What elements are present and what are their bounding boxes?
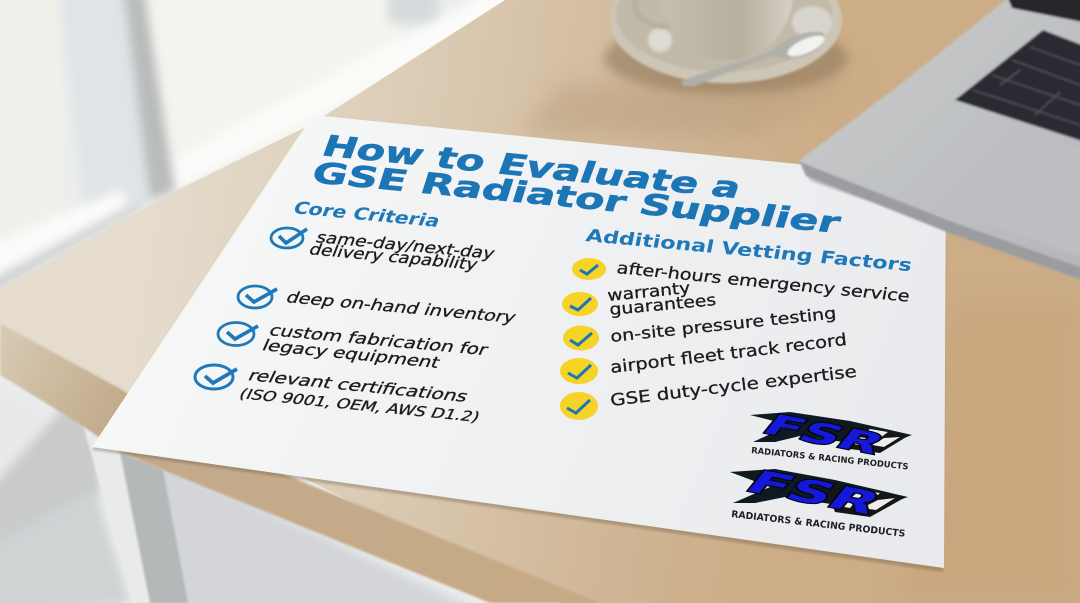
- item: on-site pressure testing: [563, 303, 837, 350]
- spoon: [681, 32, 824, 86]
- item: GSE duty-cycle expertise: [560, 362, 858, 420]
- item: deep inventory: deep on-hand inventory: [283, 288, 519, 327]
- item: custom fabrication: legacy equipment: [259, 336, 443, 372]
- item: airport fleet track record: airport fleet track record: [609, 330, 848, 377]
- item: after-hours emergency service: after-hours emergency service: [615, 258, 911, 306]
- laptop: [800, 0, 1080, 280]
- coffee saucer: [604, 0, 848, 94]
- item: GSE duty-cycle expertise: GSE duty-cycle expertise: [609, 362, 858, 410]
- logo: FSR top: FSR: [755, 409, 893, 461]
- logo: FSR bottom: RADIATORS & RACING PRODUCTS: [731, 509, 906, 540]
- logo: FSR bottom: FSR: [737, 464, 889, 522]
- heading: core criteria: Core Criteria: [290, 199, 443, 232]
- logo: FSR top: RADIATORS & RACING PRODUCTS: [751, 446, 909, 472]
- floor: [0, 375, 90, 603]
- item: deep inventory: [238, 286, 519, 327]
- item: same-day delivery: same-day/next-day: [314, 228, 498, 263]
- item: same-day delivery: delivery capability: [307, 240, 481, 274]
- item: same-day delivery: [271, 228, 498, 274]
- heading: additional vetting factors: Additional Vetting Factors: [584, 226, 914, 276]
- trackpad: [970, 140, 1080, 257]
- logo: FSR top: [750, 409, 912, 472]
- item: on-site pressure testing: on-site pressure testing: [609, 303, 837, 346]
- item: certifications: relevant certifications: [245, 366, 472, 405]
- coffee cup: [660, 0, 793, 60]
- item: after-hours emergency service: [572, 258, 911, 306]
- item: certifications: [195, 365, 482, 426]
- panel: core criteria: [195, 199, 519, 426]
- panel: additional vetting factors: [560, 226, 914, 420]
- title: GSE Radiator Supplier: [308, 156, 846, 240]
- table leg: [83, 425, 188, 603]
- wood tone shading: [520, 75, 1080, 603]
- title: [308, 129, 846, 240]
- item: custom fabrication: [218, 321, 492, 372]
- item: custom fabrication: custom fabrication for: [266, 321, 492, 359]
- logo: FSR bottom: [730, 464, 908, 540]
- paper sheet: [92, 115, 946, 568]
- item: warranty guarantees: guarantees: [609, 290, 717, 319]
- item: certifications: (ISO 9001, OEM, AWS D1.2): [236, 387, 482, 426]
- item: warranty guarantees: [562, 278, 717, 319]
- paper shadow: [92, 118, 946, 572]
- title: How to Evaluate a: [318, 129, 746, 205]
- keyboard: [955, 30, 1080, 141]
- item: warranty guarantees: warranty: [607, 278, 691, 305]
- desk front edge: [0, 323, 600, 603]
- item: airport fleet track record: [560, 330, 848, 384]
